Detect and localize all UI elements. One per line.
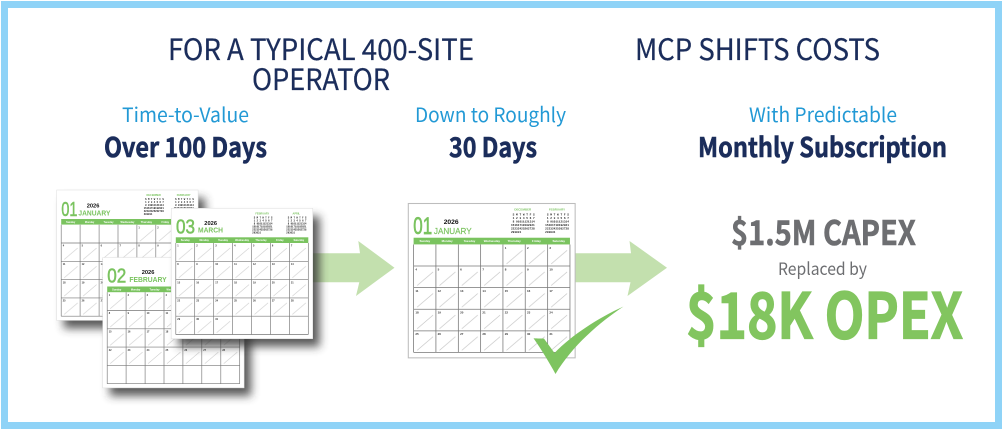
calendar: March (front right): 24 (215, 300, 219, 303)
calendar: February (front bottom): 10 (147, 312, 150, 315)
calendar: February (front bottom): 25 (165, 349, 169, 352)
calendar: single January (408, 204, 575, 358)
calendar: March (front right): 15 (177, 281, 181, 284)
calendar: single January: 15 (505, 289, 508, 293)
calendar: March (front right): 11 (234, 263, 237, 266)
calendar: February (front bottom): 17 (147, 330, 150, 334)
calendar: March (front right): 25 (234, 300, 237, 303)
calendar: February (front bottom): 27 (203, 349, 207, 352)
calendar: March (front right): 14 (291, 263, 294, 266)
calendar: single January: FEBRUARY (549, 208, 565, 212)
calendar: March (front right): 16 (196, 281, 200, 284)
calendar: February (front bottom): 3 (147, 294, 149, 297)
calendar: single January: 1 (505, 246, 507, 250)
arrow: second transition (570, 241, 667, 296)
calendar: March (front right): 18 (234, 281, 237, 284)
calendar: single January: 17 (549, 289, 553, 293)
calendar: March (front right): 10 (215, 263, 219, 266)
calendar: March (front right): 28 (291, 300, 294, 303)
calendar: March (front right): 22 (177, 300, 181, 303)
calendar: March (front right): 30 (196, 318, 200, 321)
calendar: January (back): FEBRUARY (177, 194, 191, 197)
calendar: February (front bottom): 2026 (142, 270, 154, 276)
calendar: single January: 29 (505, 332, 508, 336)
calendar: March (front right): 17 (215, 281, 219, 284)
calendar: March (front right): 2 (196, 245, 198, 248)
calendar: March (front right) (171, 208, 320, 347)
calendar: January (back): 9 (157, 245, 159, 248)
calendar: March (front right): 03 (176, 216, 195, 238)
calendar: February (front bottom): 9 (128, 312, 130, 315)
calendar: single January: JANUARY (434, 227, 472, 236)
icon: green check mark (534, 306, 624, 374)
calendar: March (front right): 9 (196, 263, 198, 266)
calendar: single January: 27 (460, 332, 464, 336)
calendar: single January: 19 (438, 311, 441, 315)
calendar: January (back): DECEMBER (147, 194, 161, 197)
calendar: single January: 22 (505, 311, 508, 315)
calendar: January (back): 20 (101, 281, 104, 284)
calendar: March (front right): 7 (291, 245, 293, 248)
calendar: March (front right): 31 (215, 318, 219, 321)
calendar: February (front bottom): 4 (165, 294, 168, 297)
calendar: February (front bottom) (103, 258, 251, 396)
calendar: single January: 28 (482, 332, 486, 336)
calendar: March (front right): 29 (177, 318, 181, 321)
calendar: single January: 6 (460, 267, 462, 271)
text: replaced by: Replaced by (778, 255, 867, 280)
calendar: January (back): 01 (61, 199, 77, 221)
calendar: February (front bottom): 11 (165, 312, 169, 315)
column 1 label: time-to-value: Time-to-Value (122, 99, 249, 128)
calendar: January (back): 13 (101, 263, 104, 266)
calendar: March (front right): 23 (196, 300, 200, 303)
heading: for a typical 400-site operator: FOR A TYPICAL 400-SITE (168, 27, 474, 69)
calendar: single January: 26 (438, 332, 441, 336)
calendar: January (back): 11 (63, 263, 66, 266)
calendar: January (back): 26 (82, 300, 85, 303)
calendar: January (back) (57, 190, 205, 328)
calendar: January (back): 27 (101, 300, 104, 303)
calendar: March (front right): 21 (291, 281, 294, 284)
column 2 label: down to roughly (415, 99, 567, 165)
heading: for a typical 400-site operator (168, 27, 474, 99)
calendar: February (front bottom): 8 (109, 312, 111, 315)
calendar: single January: 25 (415, 332, 419, 336)
calendar: February (front bottom): 1 (109, 294, 111, 297)
calendar: March (front right): APRIL (293, 212, 301, 215)
arrow: first transition (300, 241, 394, 296)
calendar: January (back): 18 (63, 281, 66, 284)
calendar: March (front right): 12 (253, 263, 256, 266)
calendar: January (back): 6 (101, 245, 103, 248)
calendar: single January: 4 (415, 267, 417, 271)
calendar: January (back): 19 (82, 281, 85, 284)
calendar: January (back): 2 (157, 226, 159, 229)
calendar: March (front right): 27 (272, 300, 275, 303)
calendar: January (back): 5 (82, 245, 84, 248)
calendar: single January: 2026 (444, 219, 459, 226)
calendar: single January: 11 (415, 289, 419, 293)
calendar: single January: 3 (549, 246, 551, 250)
cost: $1.5M CAPEX: $1.5M CAPEX (731, 206, 916, 255)
calendar: single January: 13 (460, 289, 464, 293)
calendar: February (front bottom): 15 (109, 330, 112, 334)
calendar: January (back): 1 (138, 226, 140, 229)
calendar: February (front bottom): 02 (107, 266, 126, 288)
calendar: single January: 8 (505, 267, 507, 271)
calendar: single January: 24 (549, 311, 553, 315)
calendar: single January: 18 (415, 311, 419, 315)
calendar: February (front bottom): 16 (128, 330, 131, 334)
calendar: single January: 12 (438, 289, 441, 293)
calendar: February (front bottom): 22 (109, 349, 112, 352)
column 3 label: with predictable (698, 99, 947, 165)
calendar: January (back): JANUARY (78, 211, 111, 218)
calendar: January (back): 4 (63, 245, 65, 248)
calendar: single January: 14 (482, 289, 486, 293)
column 2 label: down to roughly: 30 Days (449, 126, 537, 165)
calendar: February (front bottom): 18 (165, 330, 169, 334)
calendar: March (front right): 20 (272, 281, 275, 284)
calendar: March (front right): 5 (253, 245, 255, 248)
calendar: single January: 30 (527, 332, 531, 336)
calendar: single January: 7 (482, 267, 484, 271)
calendar: single January: 21 (482, 311, 486, 315)
calendar: single January: 2 (527, 246, 529, 250)
calendar: February (front bottom): FEBRUARY (129, 277, 167, 284)
column 1 label: time-to-value (104, 99, 267, 165)
calendar: February (front bottom): 26 (184, 349, 188, 352)
column 3 label: with predictable: Monthly Subscription (698, 126, 947, 165)
heading: for a typical 400-site operator: OPERATOR (252, 57, 390, 99)
calendar: February (front bottom): 2 (128, 294, 130, 297)
calendar: January (back): 7 (120, 245, 122, 248)
calendar: March (front right): MARCH (198, 228, 223, 235)
calendar: single January: 5 (438, 267, 440, 271)
calendar: March (front right): 1 (177, 245, 179, 248)
calendar: single January: 01 (413, 214, 432, 240)
calendar: March (front right): FEBRUARY (255, 212, 270, 215)
column 2 label: down to roughly: Down to Roughly (415, 99, 567, 128)
calendar: February (front bottom): 28 (222, 349, 226, 352)
calendar: January (back): 2026 (87, 204, 99, 210)
calendar: February (front bottom): 23 (128, 349, 131, 352)
calendar: March (front right): 6 (272, 245, 274, 248)
calendar: single January: 31 (549, 332, 553, 336)
calendar: February (front bottom): 24 (147, 349, 150, 352)
calendar: single January: 10 (549, 267, 553, 271)
calendar: single January: DECEMBER (514, 208, 532, 212)
calendar: March (front right): 13 (272, 263, 275, 266)
calendar: January (back): 8 (138, 245, 140, 248)
calendar: March (front right): 26 (253, 300, 256, 303)
calendar: single January: 16 (527, 289, 531, 293)
calendar: March (front right): 3 (215, 245, 217, 248)
calendar: single January: 23 (527, 311, 531, 315)
heading: MCP shifts costs: MCP SHIFTS COSTS (635, 27, 880, 69)
calendar: March (front right): 8 (177, 263, 179, 266)
calendar: March (front right): 2026 (204, 221, 217, 227)
calendar: single January: 9 (527, 267, 529, 271)
column 3 label: with predictable: With Predictable (749, 99, 897, 128)
calendar: March (front right): 19 (253, 281, 256, 284)
calendar: January (back): 25 (63, 300, 66, 303)
calendar: March (front right): 4 (234, 245, 236, 248)
calendar: single January: 20 (460, 311, 464, 315)
calendar: January (back): 12 (82, 263, 85, 266)
column 1 label: time-to-value: Over 100 Days (104, 126, 267, 165)
